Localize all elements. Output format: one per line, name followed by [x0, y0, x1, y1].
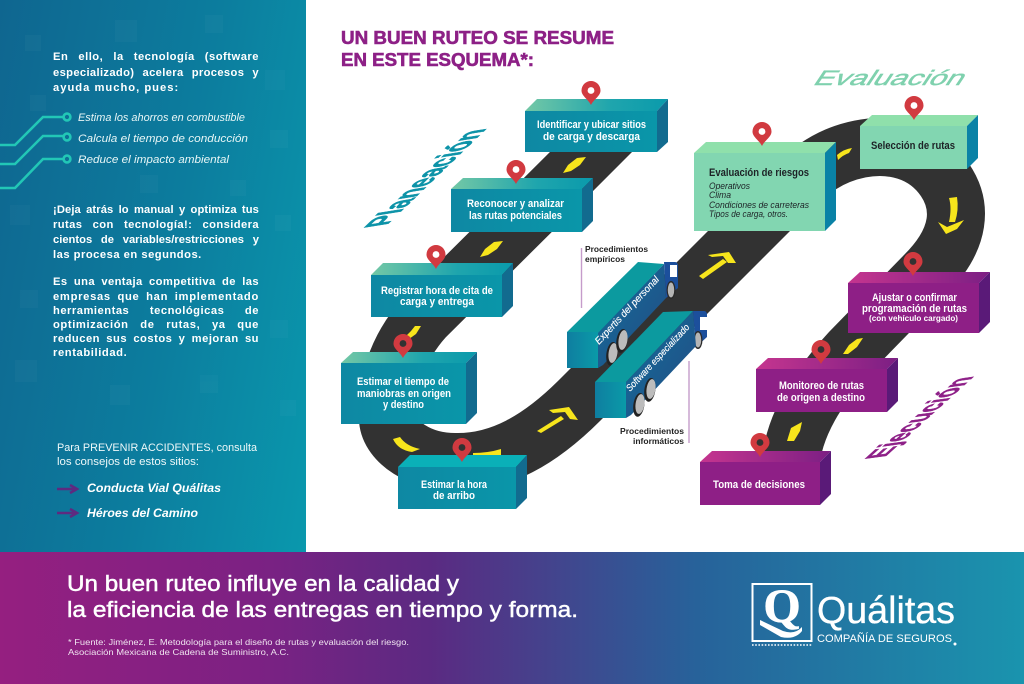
truck: Software especializado	[595, 311, 707, 418]
text block: prevent accidents	[57, 442, 258, 468]
box: Ajustar: (con vehículo cargado)	[869, 314, 958, 323]
box: Estimar tiempo	[341, 352, 477, 424]
pin	[506, 160, 526, 184]
text block: prevent accidents: Para PREVENIR ACCIDENTES, consulta	[57, 442, 258, 454]
bullet list: Calcula el tiempo de conducción	[78, 133, 248, 145]
background pattern squares	[0, 0, 306, 552]
callout: procedimientos informáticos	[620, 427, 685, 446]
box: Evaluación de riesgos: Tipos de carga, otros.	[709, 209, 788, 219]
box: Ajustar: Ajustar o confirmar	[872, 292, 958, 304]
text block: optimize with technology: las procesa en segundos.	[53, 249, 202, 261]
bullet list: Reduce el impacto ambiental	[78, 154, 230, 166]
truck: Expertis del personal: Expertis del personal	[593, 274, 662, 347]
circuit lines with bullets	[0, 114, 70, 188]
pin	[750, 433, 770, 457]
callout: procedimientos empíricos: Procedimientos	[585, 245, 649, 254]
box: Evaluación de riesgos: Condiciones de carreteras	[709, 200, 809, 210]
box: Estimar tiempo: maniobras en origen	[357, 388, 451, 400]
box: Identificar	[525, 99, 668, 152]
box: Ajustar: programación de rutas	[862, 303, 967, 315]
box: Estimar arribo	[398, 455, 527, 509]
text block: competitive advantage: empresas que han implementado	[53, 290, 259, 302]
text block: competitive advantage: reducen sus costos y mejoran su	[53, 333, 259, 345]
box: Registrar: carga y entrega	[400, 296, 475, 308]
title: UN BUEN RUTEO SE RESUME	[341, 28, 614, 48]
pin	[582, 81, 600, 105]
text block: competitive advantage: optimización de rutas, ya que	[53, 319, 259, 331]
text block: technology intro	[53, 51, 259, 94]
box: Toma de decisiones: Toma de decisiones	[713, 479, 805, 491]
box: Selección de rutas: Selección de rutas	[871, 140, 955, 152]
text block: optimize with technology	[53, 204, 259, 261]
box: Reconocer: las rutas potenciales	[469, 210, 562, 222]
logo: Quálitas	[752, 580, 956, 646]
footer headline: Un buen ruteo influye en la calidad y	[67, 571, 459, 596]
box: Monitoreo: Monitoreo de rutas	[779, 380, 864, 392]
pin	[812, 340, 830, 364]
box: Identificar: Identificar y ubicar sitios	[537, 119, 646, 131]
pin	[904, 252, 922, 276]
text block: technology intro: especializado) acelera procesos y	[53, 67, 259, 79]
label: Planeación: Planeación	[356, 127, 495, 230]
text block: technology intro: En ello, la tecnología (software	[53, 51, 259, 63]
bullet list	[78, 112, 248, 166]
box: Estimar tiempo: y destino	[383, 399, 424, 411]
footer source note: * Fuente: Jiménez, E. Metodología para el diseño de rutas y evaluación del riesgo.	[68, 637, 409, 647]
pin	[394, 334, 412, 358]
road	[387, 123, 956, 470]
box: Estimar arribo: de arribo	[433, 490, 475, 502]
pin	[452, 438, 472, 462]
footer headline	[67, 571, 578, 622]
box: Evaluación de riesgos	[694, 142, 836, 231]
title: EN ESTE ESQUEMA*:	[341, 50, 534, 70]
text block: optimize with technology: ¡Deja atrás lo manual y optimiza tus	[53, 204, 259, 216]
box: Reconocer: Reconocer y analizar	[467, 198, 565, 210]
text block: competitive advantage: herramientas tecnológicas de	[53, 305, 259, 317]
logo: Quálitas: Q	[763, 580, 801, 633]
footer source note: Asociación Mexicana de Cadena de Suministro, A.C.	[68, 647, 289, 657]
text block: technology intro: ayuda mucho, pues:	[53, 82, 179, 94]
callout: procedimientos empíricos	[582, 245, 689, 443]
bullet list: Estima los ahorros en combustible	[78, 112, 245, 124]
box: Selección de rutas	[860, 115, 978, 169]
box: Monitoreo	[756, 358, 898, 412]
label: Ejecución: Ejecución	[858, 375, 982, 461]
box: Estimar tiempo: Estimar el tiempo de	[357, 376, 449, 388]
link: Conducta Vial Quálitas: Conducta Vial Quálitas	[87, 483, 221, 495]
callout: procedimientos empíricos: empíricos	[585, 255, 626, 264]
box: Evaluación de riesgos: Clima	[709, 190, 731, 200]
text block: optimize with technology: cientos de variables/restricciones y	[53, 234, 259, 246]
logo: Quálitas: COMPAÑÍA DE SEGUROS	[817, 632, 952, 645]
box: Registrar	[371, 263, 513, 317]
link: Héroes del Camino: Héroes del Camino	[87, 508, 198, 520]
road arrows	[393, 148, 964, 457]
pin	[426, 245, 446, 269]
truck: Software especializado: Software especializado	[624, 322, 693, 394]
box: Identificar: de carga y descarga	[543, 131, 641, 143]
callout: procedimientos informáticos: informáticos	[633, 437, 685, 446]
box: Registrar: Registrar hora de cita de	[381, 285, 493, 297]
text block: competitive advantage: rentabilidad.	[53, 347, 127, 359]
footer headline: la eficiencia de las entregas en tiempo y forma.	[67, 597, 578, 622]
pin	[904, 96, 924, 120]
box: Evaluación de riesgos: Evaluación de riesgos	[709, 167, 809, 179]
box: Reconocer	[451, 178, 593, 232]
label: Evaluación: Evaluación	[809, 66, 973, 90]
logo: Quálitas: Quálitas	[817, 590, 955, 632]
text block: prevent accidents: los consejos de estos sitios:	[57, 456, 199, 468]
box: Ajustar	[848, 272, 990, 333]
box: Toma de decisiones	[700, 451, 831, 505]
panel: footer band	[0, 552, 1024, 684]
text block: competitive advantage	[53, 276, 259, 359]
title	[341, 28, 614, 70]
truck: Expertis del personal	[567, 262, 678, 368]
text block: competitive advantage: Es una ventaja competitiva de las	[53, 276, 259, 288]
pin	[752, 122, 772, 146]
box: Monitoreo: de origen a destino	[777, 392, 865, 404]
box: Evaluación de riesgos: Operativos	[709, 181, 750, 191]
text block: optimize with technology: rutas con tecnología!: considera	[53, 219, 259, 231]
box: Estimar arribo: Estimar la hora	[421, 479, 488, 491]
footer source note	[68, 637, 409, 657]
panel: left column	[0, 0, 306, 552]
callout: procedimientos informáticos: Procedimientos	[620, 427, 685, 436]
